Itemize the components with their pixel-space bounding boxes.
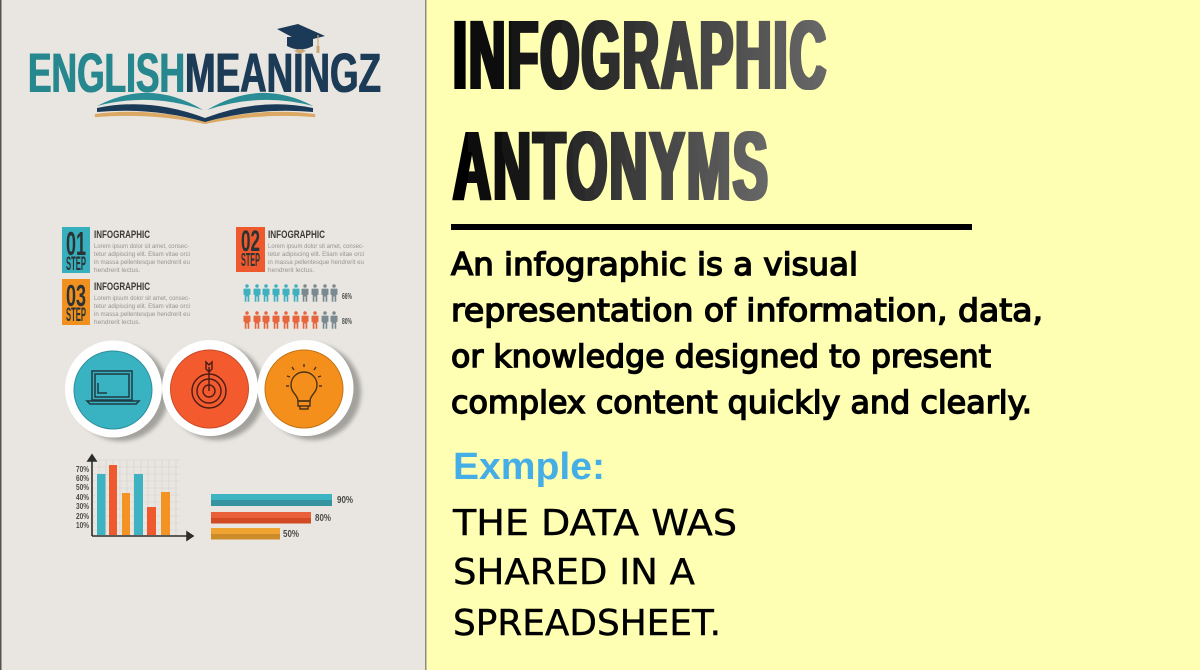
pictogram row: 80%: 80% (342, 317, 352, 326)
step 02: in massa pellentesque hendrerit eu (268, 259, 364, 266)
chart y labels: 40% (76, 493, 89, 502)
chart y labels (76, 465, 89, 530)
step 01: in massa pellentesque hendrerit eu (94, 259, 190, 266)
step 01: INFOGRAPHIC (94, 229, 150, 241)
step 03: Lorem ipsum dolor sit amet, consec- (94, 295, 190, 302)
bar 50% (211, 528, 299, 540)
logo wordmark: ENGLISH (28, 41, 185, 104)
chart y labels: 10% (76, 521, 89, 530)
example sentence: THE DATA WAS (452, 503, 737, 544)
step 03: in massa pellentesque hendrerit eu (94, 311, 190, 318)
title: INFOGRAPHIC (453, 0, 828, 110)
chart y labels: 30% (76, 502, 89, 511)
chart grid (92, 460, 180, 536)
title underline rule (451, 224, 972, 230)
definition paragraph: or knowledge designed to present (451, 339, 991, 375)
bar chart (76, 455, 193, 540)
step 03: INFOGRAPHIC (94, 281, 150, 293)
step 02 (236, 225, 364, 274)
step 02: Lorem ipsum dolor sit amet, consec- (268, 243, 364, 250)
example sentence: SPREADSHEET. (453, 603, 721, 644)
title: ANTONYMS (453, 112, 770, 220)
chart y labels: 50% (76, 483, 89, 492)
icon: open book (95, 93, 315, 124)
step 03: hendrerit lectus. (94, 319, 140, 326)
step 01 (62, 225, 190, 275)
icon: graduation cap (277, 24, 325, 54)
chart axes (88, 455, 193, 540)
bar 80%: 80% (315, 513, 331, 524)
right panel background (426, 0, 1200, 670)
step 02: INFOGRAPHIC (268, 229, 325, 241)
chart y labels: 20% (76, 512, 89, 521)
icon: target circle (162, 340, 265, 440)
step 03 (62, 278, 190, 326)
circle icons row (65, 340, 361, 441)
definition paragraph: complex content quickly and clearly. (451, 385, 1032, 421)
step 02: hendrerit lectus. (268, 267, 314, 274)
step 03: STEP (66, 305, 86, 326)
title (453, 0, 828, 220)
example sentence: SHARED IN A (453, 552, 695, 593)
step 03: tetur adipiscing elit. Etiam vitae orci (94, 303, 190, 310)
bar 90%: 90% (337, 495, 353, 506)
logo wordmark: MEANINGZ (185, 41, 381, 104)
chart y labels: 60% (76, 474, 89, 483)
step 02: 02 (241, 225, 260, 258)
definition paragraph: An infographic is a visual (451, 247, 858, 283)
example sentence (452, 503, 737, 644)
icon: light bulb circle (258, 340, 361, 440)
pictogram row: 80% (244, 311, 352, 329)
step 02: STEP (241, 250, 260, 270)
left panel background (0, 0, 426, 670)
logo: EnglishMeaningz (28, 24, 381, 124)
horizontal progress bars (211, 494, 353, 540)
chart y labels: 70% (76, 465, 89, 474)
infographic thumbnail: steps (62, 225, 364, 326)
step 01: hendrerit lectus. (94, 267, 140, 274)
definition paragraph (451, 247, 1043, 421)
chart bars (97, 465, 170, 535)
step 03: 03 (66, 278, 86, 313)
bar 90% (211, 494, 353, 506)
step 01: STEP (66, 254, 86, 275)
icon: laptop circle (65, 340, 169, 441)
bar 80% (211, 512, 331, 524)
step 01: tetur adipiscing elit. Etiam vitae orci (94, 251, 190, 258)
step 02: tetur adipiscing elit. Etiam vitae orci (268, 251, 364, 258)
definition paragraph: representation of information, data, (451, 293, 1043, 329)
pictogram row: 66% (244, 284, 352, 302)
example heading: Exmple: (453, 446, 605, 488)
bar 50%: 50% (283, 529, 299, 540)
pictogram row: 66%: 66% (342, 292, 352, 301)
step 01: Lorem ipsum dolor sit amet, consec- (94, 243, 189, 250)
step 01: 01 (66, 225, 86, 262)
